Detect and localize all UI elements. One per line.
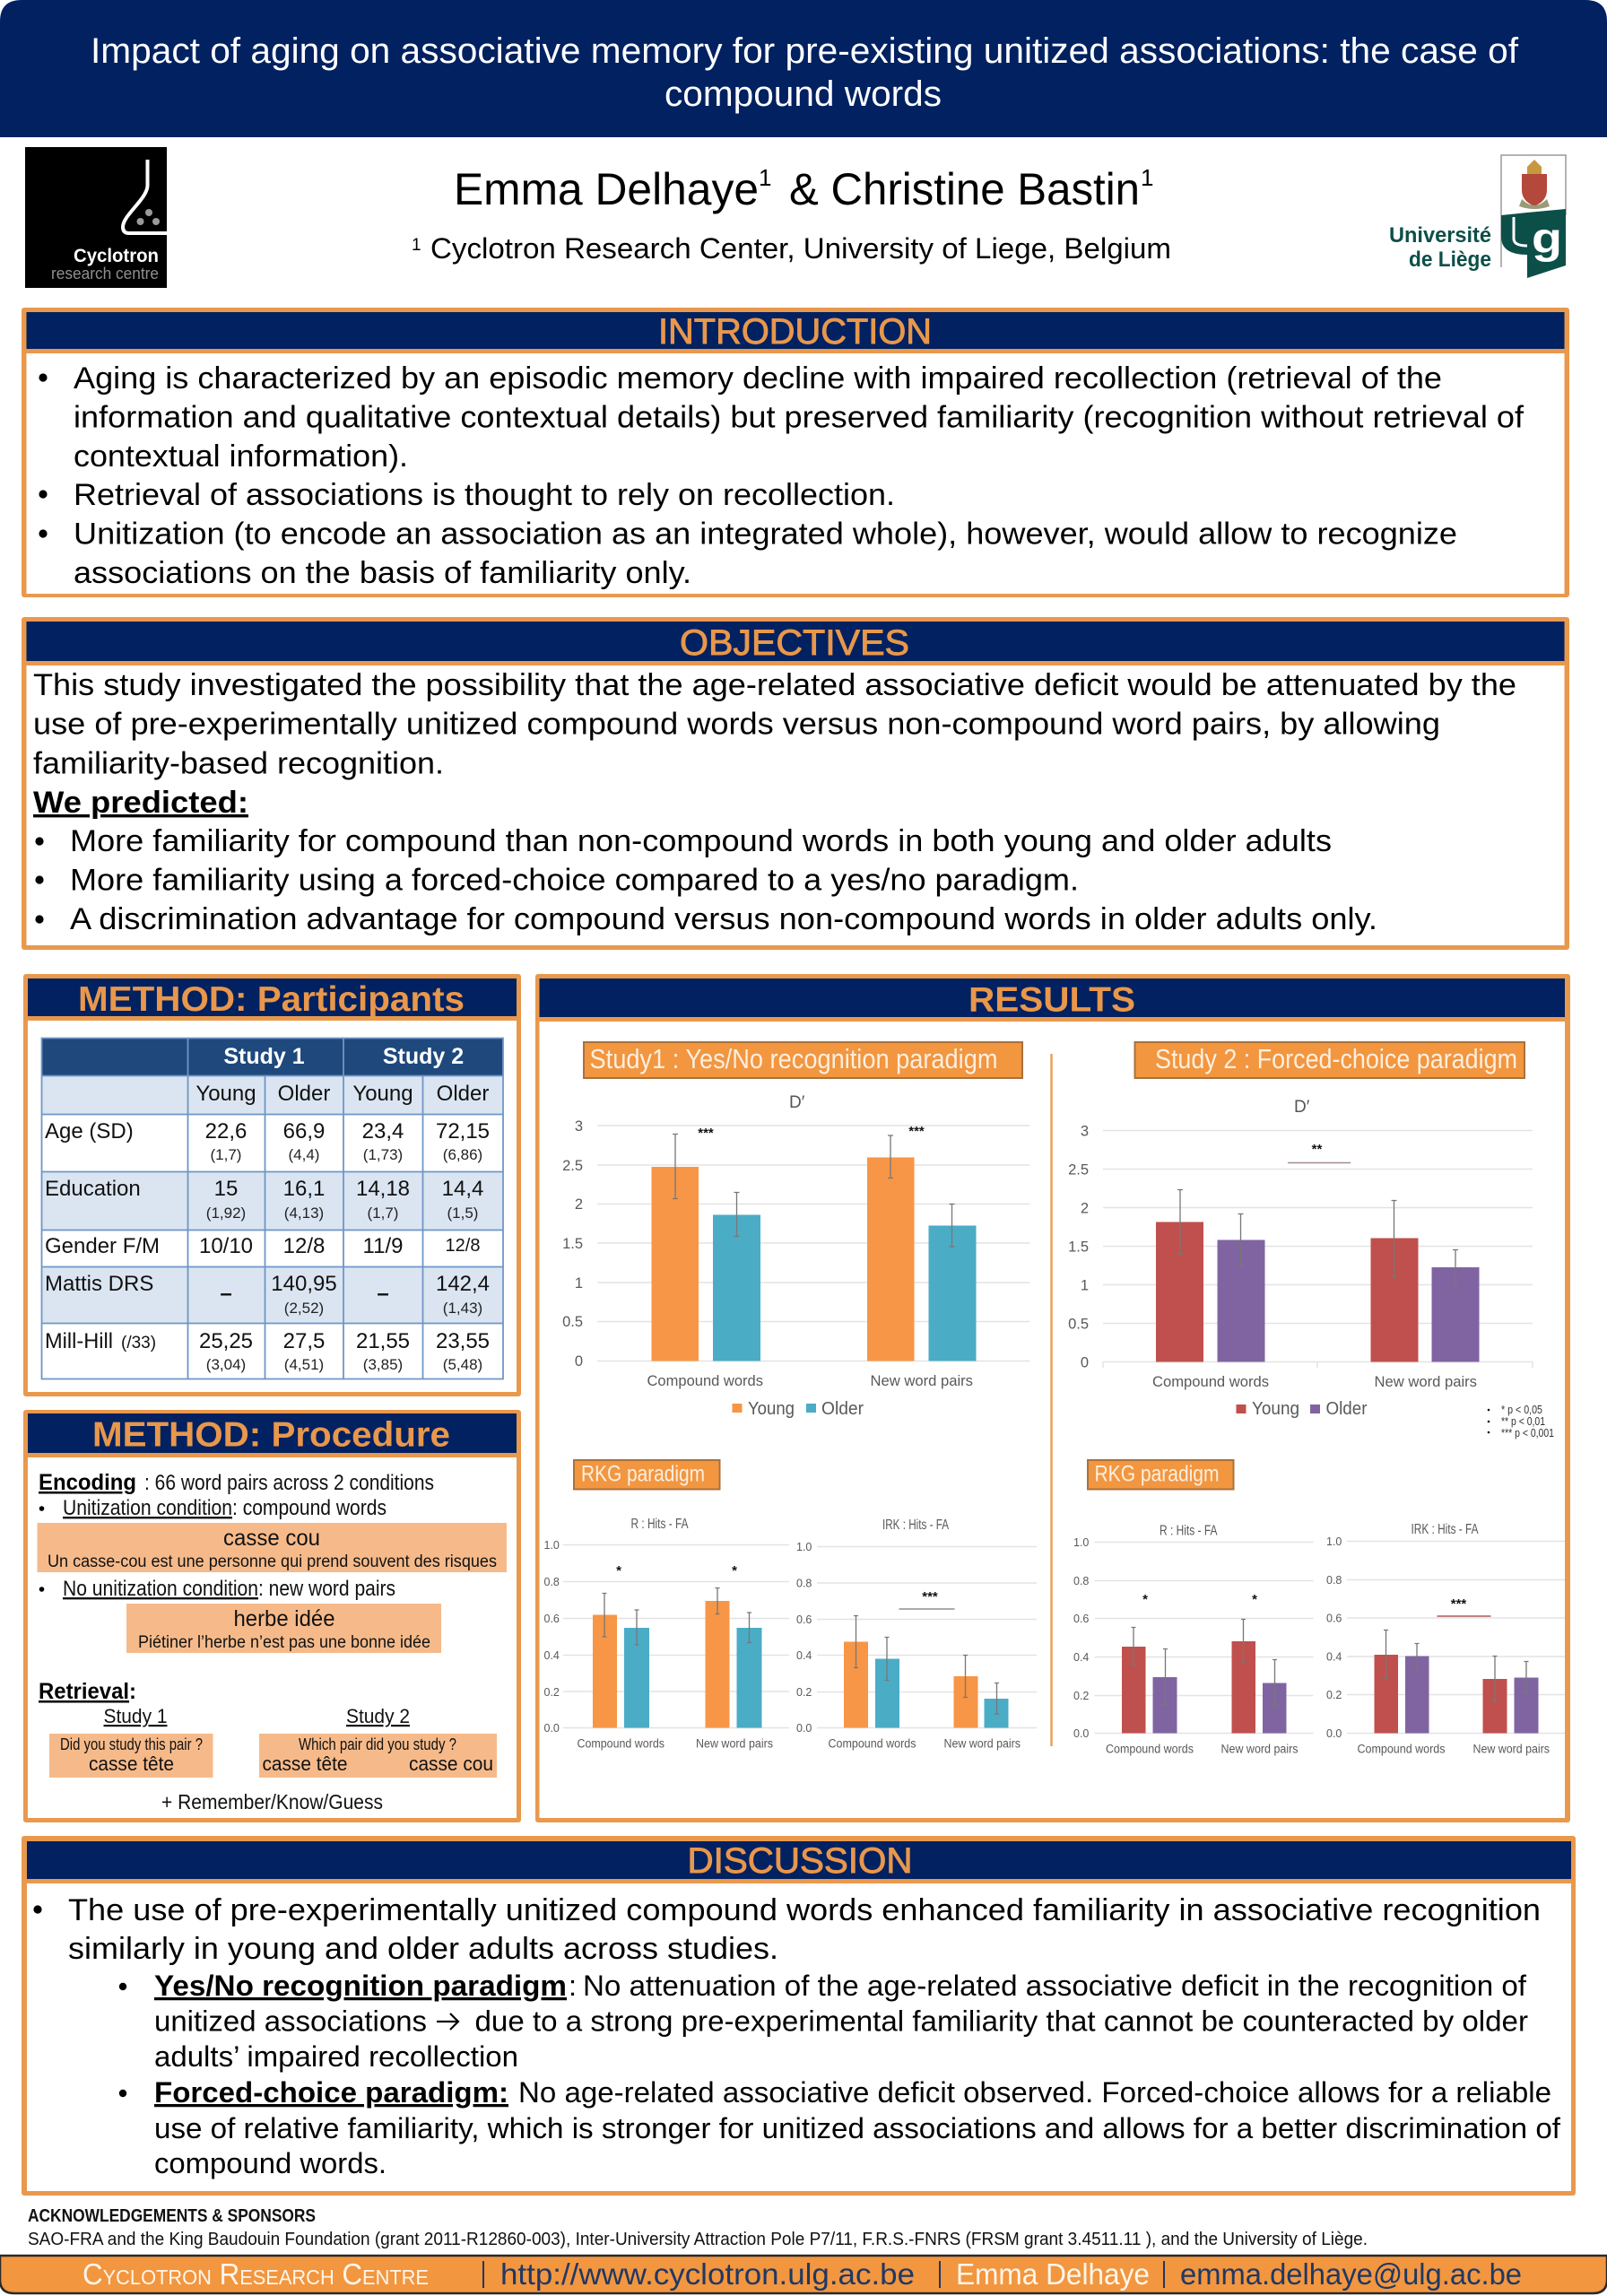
row: age: 22,6	[205, 1119, 247, 1144]
chart: study 2 D prime: 1	[1081, 1277, 1089, 1293]
logo: Université de Liège: de Liège	[1409, 248, 1491, 272]
chart: study 1 D prime: Young	[748, 1399, 795, 1419]
row: mattis	[45, 1272, 490, 1317]
example box: herbe idée: herbe idée	[233, 1606, 335, 1631]
chart: study 1 D prime: 3	[575, 1118, 583, 1135]
text: objectives: More familiarity for compound than non-compound words in both young and older adults	[70, 824, 1332, 858]
text: objectives: More familiarity using a forced-choice compared to a yes/no paradigm.	[70, 863, 1079, 897]
text: introduction bullets: Unitization (to encode an association as an integrated whole), however, would allow to recognize	[74, 517, 1457, 551]
text: forced-choice paradigm: use of relative familiarity, which is stronger for unitized associations and allows for a better discrimination of	[154, 2112, 1561, 2144]
text: objectives: familiarity-based recognition.	[33, 746, 444, 780]
text: yes/no paradigm: unitized associations	[154, 2005, 427, 2038]
chart: study 2 R hits minus FA: 1.0	[1073, 1536, 1089, 1549]
text: forced-choice paradigm: No age-related associative deficit observed. Forced-choice allows for a reliable	[518, 2076, 1551, 2109]
text: yes/no paradigm: No attenuation of the age-related associative deficit in the recognition of	[583, 1970, 1527, 2002]
row: gender: 12/8	[283, 1234, 325, 1258]
text: yes/no paradigm	[119, 1970, 1528, 2073]
row: gender: 11/9	[363, 1234, 403, 1258]
significance legend: ** p < 0,01	[1501, 1415, 1545, 1428]
encoding section	[38, 1470, 507, 1653]
chart: study 2 D prime: 2	[1081, 1200, 1089, 1216]
chart: study 1 D prime: 2	[575, 1196, 583, 1213]
row: education: (1,5)	[447, 1205, 478, 1222]
chart: study 1 IRK hits minus FA: 0.6	[796, 1613, 812, 1626]
chart: study 2 R hits minus FA: *	[1252, 1592, 1257, 1607]
example box: casse cou: casse cou	[223, 1526, 320, 1551]
row: age: 23,4	[362, 1119, 404, 1144]
chart: study 2 D prime: D′	[1294, 1098, 1310, 1117]
row: gender	[45, 1234, 480, 1258]
chart: study 2 R hits minus FA	[1073, 1523, 1313, 1756]
table: participants	[41, 1039, 503, 1379]
text: introduction bullets	[39, 361, 1524, 590]
row: education: 14,4	[442, 1177, 483, 1201]
affiliation: 1	[412, 236, 421, 255]
example box: study 1: Did you study this pair ?	[60, 1735, 203, 1753]
row: mill-hill	[45, 1329, 490, 1373]
title banner: Impact of aging on associative memory for pre-existing unitized associations: the case of	[91, 31, 1519, 71]
example box: study 1: casse tête	[89, 1752, 174, 1775]
table header: Young	[195, 1082, 256, 1106]
panel: method procedure	[23, 1410, 521, 1822]
row: gender: Gender F/M	[45, 1234, 160, 1258]
row: mattis: Mattis DRS	[45, 1272, 153, 1296]
chart: study 1 D prime: D′	[789, 1093, 805, 1112]
chart: study 1 IRK hits minus FA: 0.0	[796, 1722, 812, 1735]
heading: method participants: METHOD: Participants	[78, 980, 465, 1019]
chart: study 2 D prime: 3	[1081, 1123, 1089, 1139]
label: RKG paradigm study 1: RKG paradigm	[581, 1462, 705, 1487]
chart: study 2 D prime: 0.5	[1068, 1317, 1089, 1333]
text: objectives: We predicted:	[33, 786, 248, 820]
chart: study 2 R hits minus FA: *	[1142, 1592, 1148, 1607]
text: objectives: use of pre-experimentally unitized compound words versus non-compound word pairs, by allowing	[33, 707, 1440, 741]
chart: study 1 R hits minus FA: 1.0	[543, 1539, 560, 1552]
footer bar: emma.delhaye@ulg.ac.be	[1180, 2257, 1522, 2291]
chart: study 1 D prime: ***	[908, 1124, 925, 1139]
chart: study 2 IRK hits minus FA: 0.0	[1326, 1727, 1342, 1740]
significance legend: * p < 0,05	[1501, 1404, 1542, 1416]
example box: herbe idée	[126, 1604, 441, 1653]
chart: study 2 R hits minus FA: R : Hits - FA	[1160, 1523, 1218, 1539]
chart: study 1 R hits minus FA: 0.6	[543, 1613, 560, 1625]
row: age: Age (SD)	[45, 1119, 134, 1144]
chart: study 2 IRK hits minus FA	[1326, 1522, 1565, 1756]
encoding section: : 66 word pairs across 2 conditions	[144, 1471, 434, 1495]
significance legend	[1488, 1404, 1554, 1439]
chart: study 2 R hits minus FA: 0.8	[1073, 1575, 1089, 1587]
text: forced-choice paradigm	[119, 2076, 1561, 2179]
chart: study 2 IRK hits minus FA: Compound words	[1358, 1742, 1446, 1756]
table header: Older	[278, 1082, 330, 1106]
chart: study 2 D prime: Compound words	[1152, 1373, 1269, 1390]
chart: study 2 IRK hits minus FA: IRK : Hits - FA	[1412, 1522, 1479, 1537]
row: mill-hill: (5,48)	[443, 1356, 482, 1373]
row: education: 14,18	[356, 1177, 410, 1201]
chart: study 2 IRK hits minus FA: 0.2	[1326, 1689, 1342, 1701]
text: discussion main point: similarly in young and older adults across studies.	[68, 1932, 778, 1966]
chart: study 2 R hits minus FA: Compound words	[1106, 1742, 1194, 1756]
chart: study 1 R hits minus FA: 0.4	[543, 1649, 560, 1662]
row: education: 16,1	[283, 1177, 325, 1201]
chart: study 1 R hits minus FA: New word pairs	[696, 1736, 773, 1751]
chart: study 1 IRK hits minus FA: 0.8	[796, 1577, 812, 1589]
row: age: (6,86)	[443, 1146, 482, 1163]
label: study 1: Study1 : Yes/No recognition paradigm	[590, 1043, 997, 1074]
title banner: compound words	[665, 74, 942, 114]
text: yes/no paradigm: adults’ impaired recollection	[154, 2040, 518, 2073]
chart: study 2 IRK hits minus FA: 0.4	[1326, 1650, 1342, 1663]
row: mill-hill: (3,85)	[363, 1356, 403, 1373]
text: forced-choice paradigm: Forced-choice paradigm:	[154, 2076, 508, 2109]
chart: study 2 D prime: Older	[1325, 1399, 1368, 1419]
example box: study 2: casse cou	[409, 1752, 493, 1775]
row: mill-hill: (4,51)	[284, 1356, 324, 1373]
chart: study 2 D prime: New word pairs	[1374, 1373, 1477, 1390]
table header: Older	[437, 1082, 489, 1106]
chart: study 2 R hits minus FA: 0.2	[1073, 1690, 1089, 1702]
text: discussion main point: The use of pre-experimentally unitized compound words enhanced familiarity in associative recognition	[68, 1893, 1541, 1927]
panel: discussion	[22, 1836, 1576, 2196]
chart: study 1 R hits minus FA: 0.2	[543, 1686, 560, 1699]
chart: study 2 D prime: 2.5	[1068, 1162, 1089, 1178]
chart: study 1 D prime: Older	[821, 1399, 864, 1419]
text: discussion main point	[33, 1893, 1541, 1966]
acknowledgements	[28, 2206, 1368, 2249]
row: education: (4,13)	[284, 1205, 324, 1222]
chart: study 2 R hits minus FA: 0.4	[1073, 1651, 1089, 1664]
text: introduction bullets: Retrieval of associations is thought to rely on recollection.	[74, 478, 895, 512]
panel: objectives	[22, 617, 1569, 950]
example box: study 1	[49, 1734, 213, 1778]
chart: study 1 IRK hits minus FA: 0.2	[796, 1686, 812, 1699]
row: education	[45, 1177, 483, 1222]
arrow	[437, 2013, 458, 2030]
heading: objectives: OBJECTIVES	[680, 623, 909, 663]
chart: study 1 D prime: ***	[698, 1126, 714, 1141]
label: study 2: Study 2 : Forced-choice paradigm	[1155, 1043, 1517, 1074]
example box: study 2	[259, 1734, 497, 1778]
chart: study 2 R hits minus FA: 0.6	[1073, 1613, 1089, 1625]
row: mill-hill: 27,5	[283, 1329, 325, 1353]
acknowledgements: ACKNOWLEDGEMENTS & SPONSORS	[28, 2206, 316, 2226]
footer bar: Emma Delhaye	[956, 2257, 1150, 2291]
row: age: 72,15	[436, 1119, 490, 1144]
table header: Study 2	[383, 1044, 464, 1069]
logo: Cyclotron research centre: research centre	[51, 265, 159, 283]
chart: study 1 D prime	[562, 1093, 1029, 1419]
significance legend: *** p < 0,001	[1501, 1427, 1554, 1439]
chart: study 2 IRK hits minus FA: ***	[1451, 1596, 1466, 1612]
row: age: (1,73)	[363, 1146, 403, 1163]
row: mill-hill: Mill-Hill	[45, 1329, 113, 1353]
row: mill-hill: 25,25	[199, 1329, 253, 1353]
chart: study 1 D prime: 2.5	[562, 1158, 583, 1174]
chart: study 1 R hits minus FA: *	[732, 1563, 737, 1578]
logo: Université de Liège	[1389, 155, 1566, 278]
example box: casse cou: Un casse-cou est une personne qui prend souvent des risques	[48, 1552, 497, 1571]
text: forced-choice paradigm: compound words.	[154, 2147, 387, 2179]
chart: study 2 IRK hits minus FA: 0.6	[1326, 1613, 1342, 1625]
encoding section: No unitization condition	[63, 1577, 258, 1601]
chart: study 1 D prime: 1.5	[562, 1236, 583, 1252]
text: objectives: A discrimination advantage for compound versus non-compound words in older adults only.	[70, 902, 1377, 936]
heading: results: RESULTS	[969, 981, 1135, 1019]
chart: study 1 IRK hits minus FA: IRK : Hits - FA	[882, 1518, 949, 1533]
text: introduction bullets: information and qualitative contextual details) but preserved familiarity (recognition without retrieval of	[74, 400, 1524, 434]
chart: study 2 D prime: Young	[1252, 1399, 1299, 1419]
chart: study 2 R hits minus FA: New word pairs	[1221, 1742, 1299, 1756]
row: mill-hill: 21,55	[356, 1329, 410, 1353]
panel: method participants	[23, 974, 521, 1396]
chart: study 2 D prime: **	[1312, 1142, 1322, 1157]
chart: study 2 D prime: 0	[1081, 1354, 1089, 1370]
text: introduction bullets: Aging is characterized by an episodic memory decline with impaired recollection (retrieval of the	[74, 361, 1442, 396]
row: mill-hill: (/33)	[121, 1334, 156, 1352]
text: objectives	[33, 668, 1516, 936]
footer bar: Cyclotron Research Centre	[83, 2257, 429, 2291]
chart: study 2 IRK hits minus FA: 1.0	[1326, 1535, 1342, 1548]
encoding section: Unitization condition	[63, 1496, 232, 1520]
chart: study 1 IRK hits minus FA: New word pairs	[943, 1736, 1021, 1751]
example box: casse cou	[38, 1523, 507, 1572]
logo: Université de Liège: Université	[1389, 223, 1491, 248]
table header: Study 1	[223, 1044, 305, 1069]
row: mattis: (1,43)	[443, 1300, 482, 1317]
authors: Emma Delhaye	[454, 164, 759, 214]
row: education: (1,92)	[206, 1205, 246, 1222]
row: mattis: (2,52)	[284, 1300, 324, 1317]
retrieval section: + Remember/Know/Guess	[161, 1790, 383, 1813]
heading: discussion: DISCUSSION	[687, 1841, 913, 1881]
chart: study 2 R hits minus FA: 0.0	[1073, 1727, 1089, 1740]
affiliation: Cyclotron Research Center, University of Liege, Belgium	[430, 232, 1171, 265]
chart: study 1 D prime: 0	[575, 1353, 583, 1370]
chart: study 1 IRK hits minus FA	[796, 1518, 1037, 1751]
row: age: 66,9	[283, 1119, 325, 1144]
row: mill-hill: (3,04)	[206, 1356, 246, 1373]
encoding section: Encoding	[39, 1470, 136, 1495]
text: introduction bullets: contextual information).	[74, 439, 408, 474]
chart: study 1 IRK hits minus FA: ***	[922, 1589, 938, 1605]
text: introduction bullets: associations on the basis of familiarity only.	[74, 556, 691, 590]
footer bar: http://www.cyclotron.ulg.ac.be	[500, 2257, 915, 2291]
example box: herbe idée: Piétiner l’herbe n’est pas une bonne idée	[138, 1633, 430, 1652]
encoding section: : new word pairs	[258, 1577, 395, 1601]
retrieval section: Retrieval:	[39, 1679, 136, 1704]
retrieval section: Study 2	[346, 1705, 410, 1727]
chart: study 1 R hits minus FA: Compound words	[578, 1736, 665, 1751]
text: yes/no paradigm: :	[569, 1970, 577, 2002]
chart: study 1 D prime: 1	[575, 1275, 583, 1292]
chart: study 1 IRK hits minus FA: 0.4	[796, 1649, 812, 1662]
logo: Cyclotron research centre: Cyclotron	[74, 246, 159, 266]
retrieval section	[39, 1679, 497, 1813]
row: gender: 10/10	[199, 1234, 253, 1258]
row: education: Education	[45, 1177, 141, 1201]
text: yes/no paradigm: Yes/No recognition paradigm	[154, 1970, 567, 2002]
chart: study 2 D prime	[1068, 1098, 1533, 1419]
chart: study 1 D prime: New word pairs	[870, 1372, 973, 1389]
row: age: (4,4)	[289, 1146, 319, 1163]
logo: Université de Liège: g	[1532, 215, 1562, 263]
heading: method procedure: METHOD: Procedure	[92, 1415, 450, 1455]
authors: 1	[1141, 164, 1153, 191]
text: yes/no paradigm: due to a strong pre-experimental familiarity that cannot be counteracted by older	[475, 2005, 1528, 2038]
acknowledgements: SAO-FRA and the King Baudouin Foundation (grant 2011-R12860-003), Inter-University Attraction Pole P7/11, F.R.S.-FNRS (FRSM grant 3.4511.11 ), and the University of Liège.	[28, 2230, 1368, 2249]
row: mattis: 140,95	[271, 1272, 337, 1296]
row: age	[45, 1119, 490, 1163]
footer bar	[0, 2256, 1607, 2293]
example box: study 2: Which pair did you study ?	[299, 1735, 456, 1753]
chart: study 2 IRK hits minus FA: New word pairs	[1472, 1742, 1550, 1756]
retrieval section: Study 1	[104, 1705, 167, 1727]
row: education: 15	[214, 1177, 238, 1201]
authors: & Christine Bastin	[789, 164, 1140, 214]
chart: study 1 D prime: 0.5	[562, 1314, 583, 1330]
table header	[195, 1044, 489, 1106]
chart: study 1 D prime: Compound words	[647, 1372, 763, 1389]
chart: study 1 R hits minus FA: 0.8	[543, 1576, 560, 1588]
chart: study 1 R hits minus FA: R : Hits - FA	[631, 1517, 689, 1532]
chart: study 1 IRK hits minus FA: Compound words	[829, 1736, 916, 1751]
panel: results	[535, 974, 1570, 1822]
row: mattis: –	[220, 1282, 232, 1306]
table header: Young	[352, 1082, 413, 1106]
row: mill-hill: 23,55	[436, 1329, 490, 1353]
panel: introduction	[22, 308, 1569, 597]
logo: Cyclotron research centre	[25, 147, 167, 288]
row: mattis: 142,4	[436, 1272, 490, 1296]
chart: study 1 R hits minus FA: 0.0	[543, 1722, 560, 1735]
heading: introduction: INTRODUCTION	[658, 312, 932, 352]
chart: study 2 D prime: 1.5	[1068, 1239, 1089, 1256]
label: RKG paradigm study 2: RKG paradigm	[1094, 1462, 1220, 1487]
text: objectives: This study investigated the possibility that the age-related associative deficit would be attenuated by the	[33, 668, 1516, 702]
row: education: (1,7)	[368, 1205, 398, 1222]
chart: study 1 R hits minus FA: *	[616, 1563, 621, 1578]
chart: study 2 IRK hits minus FA: 0.8	[1326, 1574, 1342, 1587]
authors: 1	[759, 164, 771, 191]
row: age: (1,7)	[211, 1146, 241, 1163]
row: gender: 12/8	[446, 1236, 480, 1256]
example box: study 2: casse tête	[262, 1752, 348, 1775]
title banner	[0, 0, 1607, 137]
authors	[454, 164, 1153, 214]
encoding section: : compound words	[232, 1496, 387, 1520]
row: mattis: –	[377, 1282, 389, 1306]
chart: study 1 IRK hits minus FA: 1.0	[796, 1541, 812, 1553]
chart: study 1 R hits minus FA	[543, 1517, 789, 1751]
